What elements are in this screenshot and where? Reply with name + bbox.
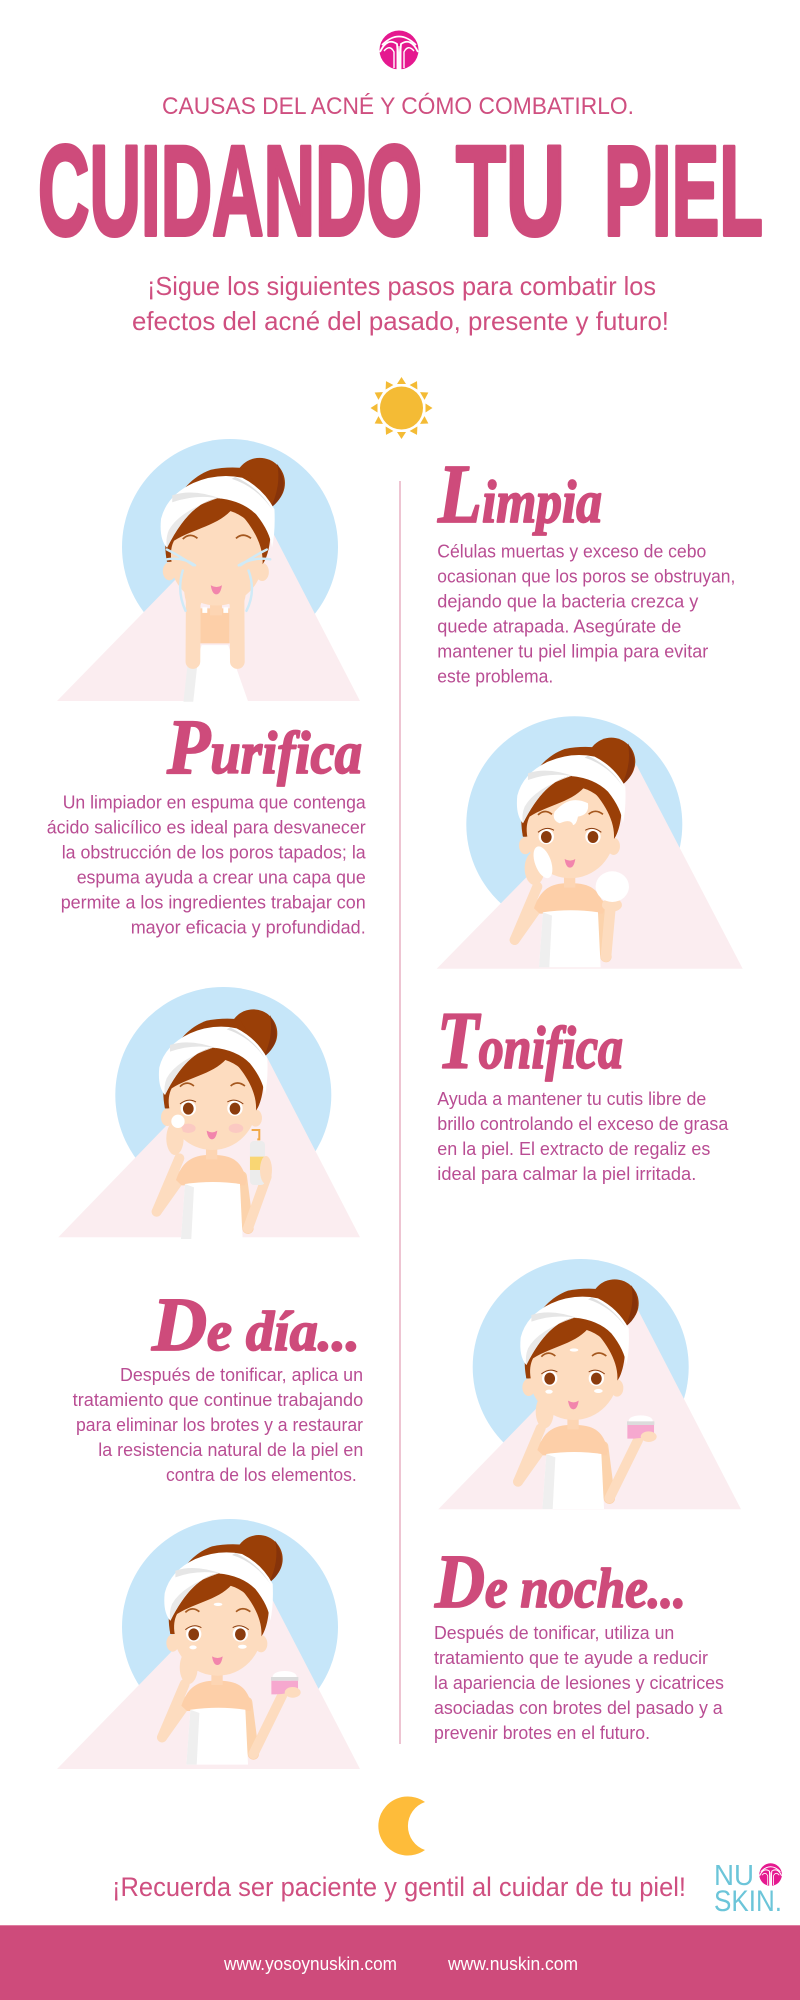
text: Limpia <box>437 541 735 686</box>
heading: Tonifica: Tonifica <box>437 995 623 1086</box>
text: De noche: asociadas con brotes del pasado y a <box>434 1698 724 1718</box>
text: Purifica <box>47 792 367 937</box>
text: De noche: tratamiento que te ayude a reducir <box>434 1648 708 1668</box>
text: Limpia: ocasionan que los poros se obstruyan, <box>437 567 735 587</box>
text: De noche: la apariencia de lesiones y cicatrices <box>434 1673 724 1693</box>
text: Limpia: dejando que la bacteria crezca y <box>437 592 698 612</box>
text: Purifica: espuma ayuda a crear una capa que <box>77 867 366 887</box>
title: CUIDANDO <box>38 120 422 263</box>
text: De día: contra de los elementos. <box>166 1465 357 1485</box>
text: Purifica: permite a los ingredientes trabajar con <box>61 892 366 912</box>
footer band <box>0 1925 800 2000</box>
intro text: ¡Sigue los siguientes pasos para combatir los <box>147 271 656 301</box>
logo: Nu Skin: NU <box>714 1860 754 1892</box>
logo: Nu Skin: SKIN. <box>714 1885 782 1918</box>
text: Tonifica <box>437 1089 729 1184</box>
text: Tonifica: ideal para calmar la piel irritada. <box>437 1164 696 1184</box>
heading: Purifica: Purifica <box>166 703 362 790</box>
text: De día <box>73 1365 363 1485</box>
text: Tonifica: brillo controlando el exceso de grasa <box>437 1114 729 1134</box>
heading: De noche: De noche... <box>434 1540 686 1624</box>
text: Limpia: Células muertas y exceso de cebo <box>437 541 706 561</box>
text: Tonifica: en la piel. El extracto de regaliz es <box>437 1139 710 1159</box>
illustration: day cream <box>438 1259 741 1509</box>
text: De noche: Después de tonificar, utiliza un <box>434 1623 674 1643</box>
footer band: www.nuskin.com <box>447 1954 578 1974</box>
subtitle: CAUSAS DEL ACNÉ Y CÓMO COMBATIRLO. <box>162 93 634 120</box>
text: Purifica: Un limpiador en espuma que contenga <box>63 792 367 812</box>
text: De día: la resistencia natural de la piel en <box>98 1440 363 1460</box>
text: De día: para eliminar los brotes y a restaurar <box>76 1415 363 1435</box>
title: TU <box>456 120 565 263</box>
icon: moon <box>378 1796 425 1856</box>
icon: sun <box>370 377 432 439</box>
text: Limpia: este problema. <box>437 666 553 686</box>
text: Limpia: quede atrapada. Asegúrate de <box>437 617 681 637</box>
text: De noche: prevenir brotes en el futuro. <box>434 1723 650 1743</box>
illustration: washing face <box>57 439 360 702</box>
logo: Nu Skin emblem <box>380 30 418 70</box>
text: Purifica: la obstrucción de los poros tapados; la <box>62 842 367 862</box>
intro text <box>132 271 669 336</box>
heading: Limpia: Limpia <box>437 448 602 541</box>
text: Tonifica: Ayuda a mantener tu cutis libre de <box>437 1089 706 1109</box>
text: Purifica: ácido salicílico es ideal para desvanecer <box>47 817 366 837</box>
logo: Nu Skin <box>714 1860 782 1918</box>
intro text: efectos del acné del pasado, presente y futuro! <box>132 306 669 336</box>
text: De noche <box>434 1623 724 1743</box>
illustration: applying foam <box>437 716 743 969</box>
heading: De día: De día... <box>151 1283 360 1367</box>
text: De día: Después de tonificar, aplica un <box>120 1365 363 1385</box>
text: Purifica: mayor eficacia y profundidad. <box>131 917 366 937</box>
illustration: night cream <box>57 1519 360 1769</box>
text: De día: tratamiento que continue trabajando <box>73 1390 363 1410</box>
footer band: www.yosoynuskin.com <box>223 1954 397 1974</box>
text: Limpia: mantener tu piel limpia para evitar <box>437 642 708 662</box>
closing message: ¡Recuerda ser paciente y gentil al cuidar de tu piel! <box>112 1872 686 1902</box>
illustration: toner <box>58 987 360 1239</box>
